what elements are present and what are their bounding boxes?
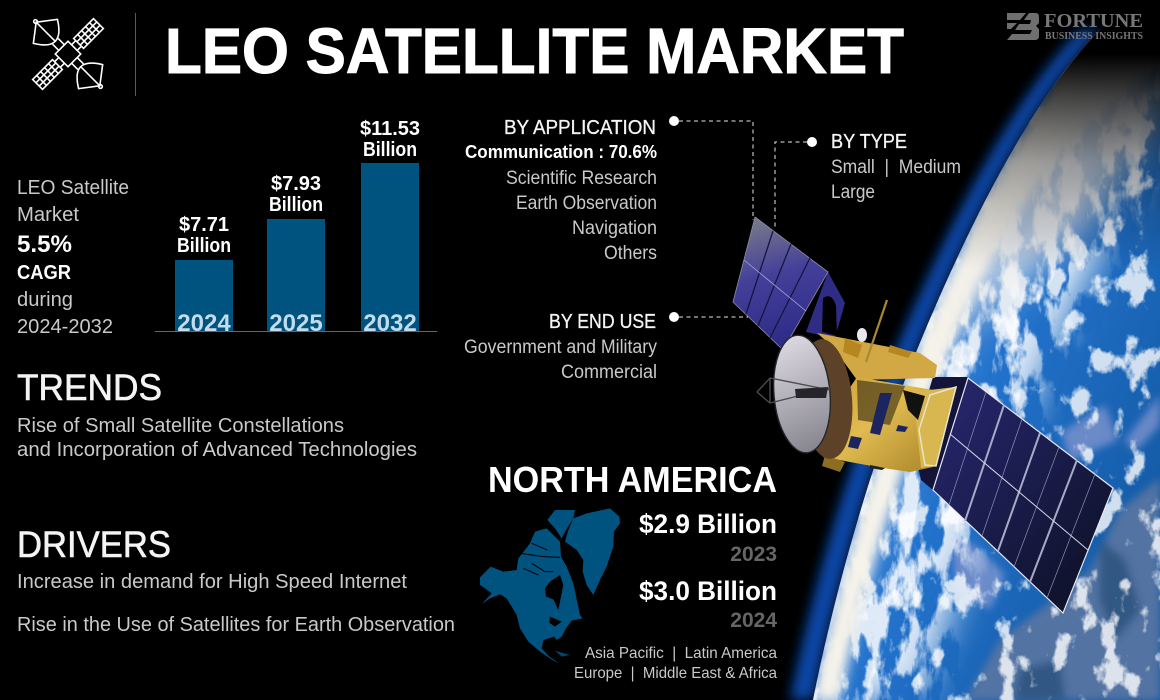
trends: TRENDS — [17, 367, 162, 408]
CAGR text block: CAGR — [17, 262, 72, 284]
by application: BY APPLICATION — [504, 117, 656, 139]
CAGR text block — [17, 177, 129, 338]
icon: satellite — [4, 0, 132, 118]
earth image — [790, 30, 1160, 700]
by end use: BY END USE — [549, 311, 656, 333]
bar 2032: 2032 — [363, 310, 417, 337]
regional stats: 2024 — [730, 609, 777, 632]
drivers: DRIVERS — [17, 524, 171, 565]
CAGR text block: LEO Satellite — [17, 177, 129, 199]
map: north america — [480, 508, 620, 663]
trends: Rise of Small Satellite Constellations — [17, 415, 344, 437]
regional stats: Europe | Middle East & Africa — [574, 665, 777, 682]
CAGR text block: Market — [17, 204, 79, 226]
callout connector lines — [679, 121, 807, 317]
bar 2032: Billion — [363, 139, 417, 161]
dish — [757, 333, 857, 461]
by application: Navigation — [572, 218, 657, 239]
regional stats: $2.9 Billion — [639, 509, 777, 539]
CAGR text block: 2024-2032 — [17, 316, 113, 338]
by application — [465, 116, 679, 264]
title: LEO SATELLITE MARKET — [165, 15, 904, 87]
logo — [1007, 10, 1143, 42]
bar 2032: $11.53 — [360, 118, 420, 140]
bar 2025: 2025 — [269, 310, 323, 337]
by end use: Government and Military — [464, 337, 657, 358]
regional stats: Asia Pacific | Latin America — [585, 645, 777, 662]
bar 2024: 2024 — [177, 310, 231, 337]
by type: BY TYPE — [831, 131, 907, 153]
logo text: FORTUNE — [1044, 10, 1143, 32]
bar chart — [155, 118, 437, 337]
logo: BUSINESS INSIGHTS — [1045, 31, 1143, 42]
regional stats: 2023 — [730, 543, 777, 566]
bar 2025 — [267, 173, 325, 337]
by application: Scientific Research — [506, 168, 657, 189]
bar 2025: $7.93 — [271, 173, 321, 195]
by end use — [464, 311, 679, 383]
white limb band — [813, 30, 1104, 700]
drivers: Rise in the Use of Satellites for Earth Observation — [17, 614, 455, 636]
CAGR text block: during — [17, 289, 73, 311]
by type — [807, 131, 961, 203]
by type: Large — [831, 182, 875, 203]
bar 2024: Billion — [177, 235, 231, 257]
bar 2025: Billion — [269, 194, 323, 216]
logo icon — [1007, 13, 1039, 40]
regional stats: NORTH AMERICA — [488, 459, 777, 500]
body — [817, 300, 957, 472]
drivers: Increase in demand for High Speed Internet — [17, 571, 407, 593]
by application: Earth Observation — [516, 193, 657, 214]
bar 2032 — [360, 118, 420, 337]
CAGR text block: 5.5% — [17, 231, 72, 258]
trends — [17, 367, 417, 461]
by type: Small | Medium — [831, 157, 961, 178]
drivers — [17, 524, 455, 636]
header divider — [134, 13, 136, 96]
satellite — [733, 217, 1113, 613]
by application: Others — [604, 243, 657, 264]
by application: Communication : 70.6% — [465, 142, 657, 162]
regional stats — [488, 459, 777, 682]
bar 2024: $7.71 — [179, 214, 229, 236]
bar 2024 — [175, 214, 233, 337]
right solar panel — [910, 377, 1113, 613]
by end use: Commercial — [561, 362, 657, 383]
trends: and Incorporation of Advanced Technologies — [17, 439, 417, 461]
regional stats: $3.0 Billion — [639, 576, 777, 606]
left solar panel — [733, 217, 845, 350]
